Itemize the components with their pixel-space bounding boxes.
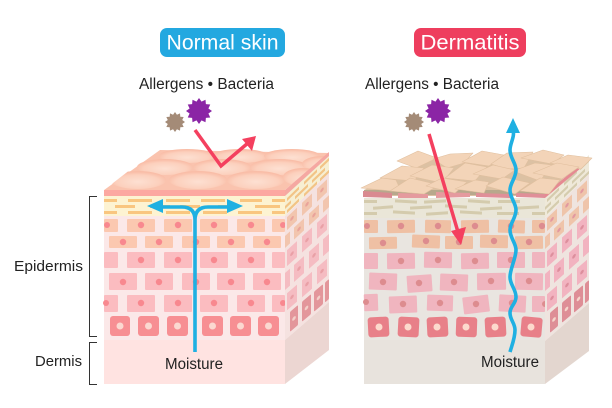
epidermis cells (363, 220, 548, 315)
side face layers (285, 153, 329, 384)
side face cells (545, 159, 589, 333)
icon: allergen particles, normal skin (165, 98, 212, 132)
label: allergens and bacteria, normal skin: Allergens • Bacteria (139, 76, 274, 93)
front face layers (364, 198, 545, 384)
side face cells (285, 158, 329, 332)
front face layers (104, 190, 285, 384)
basal cells (110, 316, 279, 336)
bracket: dermis (35, 342, 97, 384)
top skin surface (104, 149, 342, 190)
arrow: allergens deflected (195, 130, 256, 166)
arrow: moisture retained (147, 199, 243, 352)
label: moisture, dermatitis: Moisture (481, 354, 539, 371)
bracket: epidermis: Epidermis (14, 259, 83, 275)
flaking skin scales (361, 150, 592, 194)
top under-layer and damaged band (363, 158, 585, 198)
arrow: moisture escaping (506, 118, 520, 352)
arrow: allergens penetrating (429, 134, 466, 245)
basal cells (367, 316, 543, 338)
icon: allergen particles, dermatitis (404, 98, 451, 132)
heading: normal skin: Normal skin (166, 32, 278, 54)
stratum corneum bars (364, 199, 545, 216)
heading: dermatitis: Dermatitis (420, 32, 520, 54)
label: moisture, normal skin: Moisture (165, 356, 223, 373)
heading: dermatitis (414, 28, 526, 57)
side face layers (545, 155, 589, 384)
panel: dermatitis block (361, 150, 592, 384)
bracket: epidermis (14, 196, 97, 336)
bracket: dermis: Dermis (35, 354, 82, 370)
panel: normal skin block (103, 149, 342, 384)
stratum corneum bars (104, 199, 285, 214)
epidermis cells (103, 219, 286, 312)
label: allergens and bacteria, dermatitis: Allergens • Bacteria (365, 76, 499, 93)
side top edge (285, 152, 329, 196)
